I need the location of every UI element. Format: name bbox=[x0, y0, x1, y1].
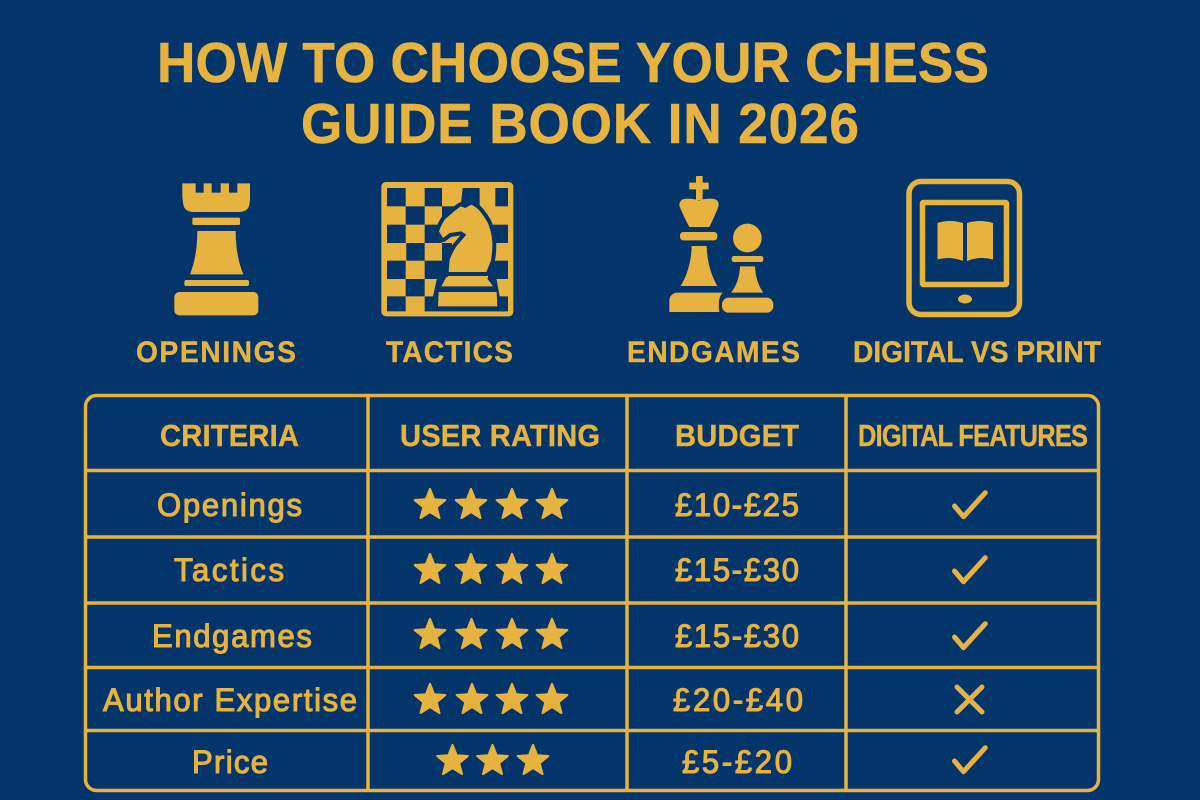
header row: CRITERIA bbox=[160, 419, 299, 453]
row: endgames: £15-£30 bbox=[675, 618, 799, 654]
header row: BUDGET bbox=[675, 419, 800, 453]
label: endgames: ENDGAMES bbox=[627, 336, 800, 369]
comparison table bbox=[86, 396, 1098, 790]
row: price bbox=[192, 744, 985, 780]
header row: DIGITAL FEATURES bbox=[858, 419, 1088, 454]
row: author expertise: £20-£40 bbox=[673, 682, 803, 718]
row: endgames bbox=[152, 618, 985, 654]
row: tactics: Tactics bbox=[174, 552, 284, 588]
row: author expertise: Author Expertise bbox=[103, 682, 357, 718]
icon: tablet with book bbox=[909, 182, 1020, 314]
icon: king and pawn bbox=[669, 176, 773, 313]
row: tactics: £15-£30 bbox=[675, 552, 799, 588]
title bbox=[157, 30, 989, 155]
table grid bbox=[86, 396, 1098, 790]
label: tactics: TACTICS bbox=[386, 336, 513, 369]
icon: rook bbox=[174, 183, 258, 315]
row: tactics bbox=[174, 552, 985, 588]
title: GUIDE BOOK IN 2026 bbox=[301, 91, 859, 155]
label: digital vs print: DIGITAL VS PRINT bbox=[853, 336, 1101, 369]
title: HOW TO CHOOSE YOUR CHESS bbox=[157, 30, 989, 94]
row: openings: £10-£25 bbox=[675, 487, 799, 523]
row: endgames: Endgames bbox=[152, 618, 312, 654]
row: price: £5-£20 bbox=[682, 744, 792, 780]
row: openings bbox=[157, 487, 985, 523]
header row: USER RATING bbox=[400, 419, 600, 453]
header row bbox=[160, 419, 1088, 454]
icon: chessboard with knight bbox=[381, 182, 513, 316]
row: author expertise bbox=[103, 682, 982, 718]
label: openings: OPENINGS bbox=[136, 336, 296, 369]
row: openings: Openings bbox=[157, 487, 302, 523]
row: price: Price bbox=[192, 744, 268, 780]
